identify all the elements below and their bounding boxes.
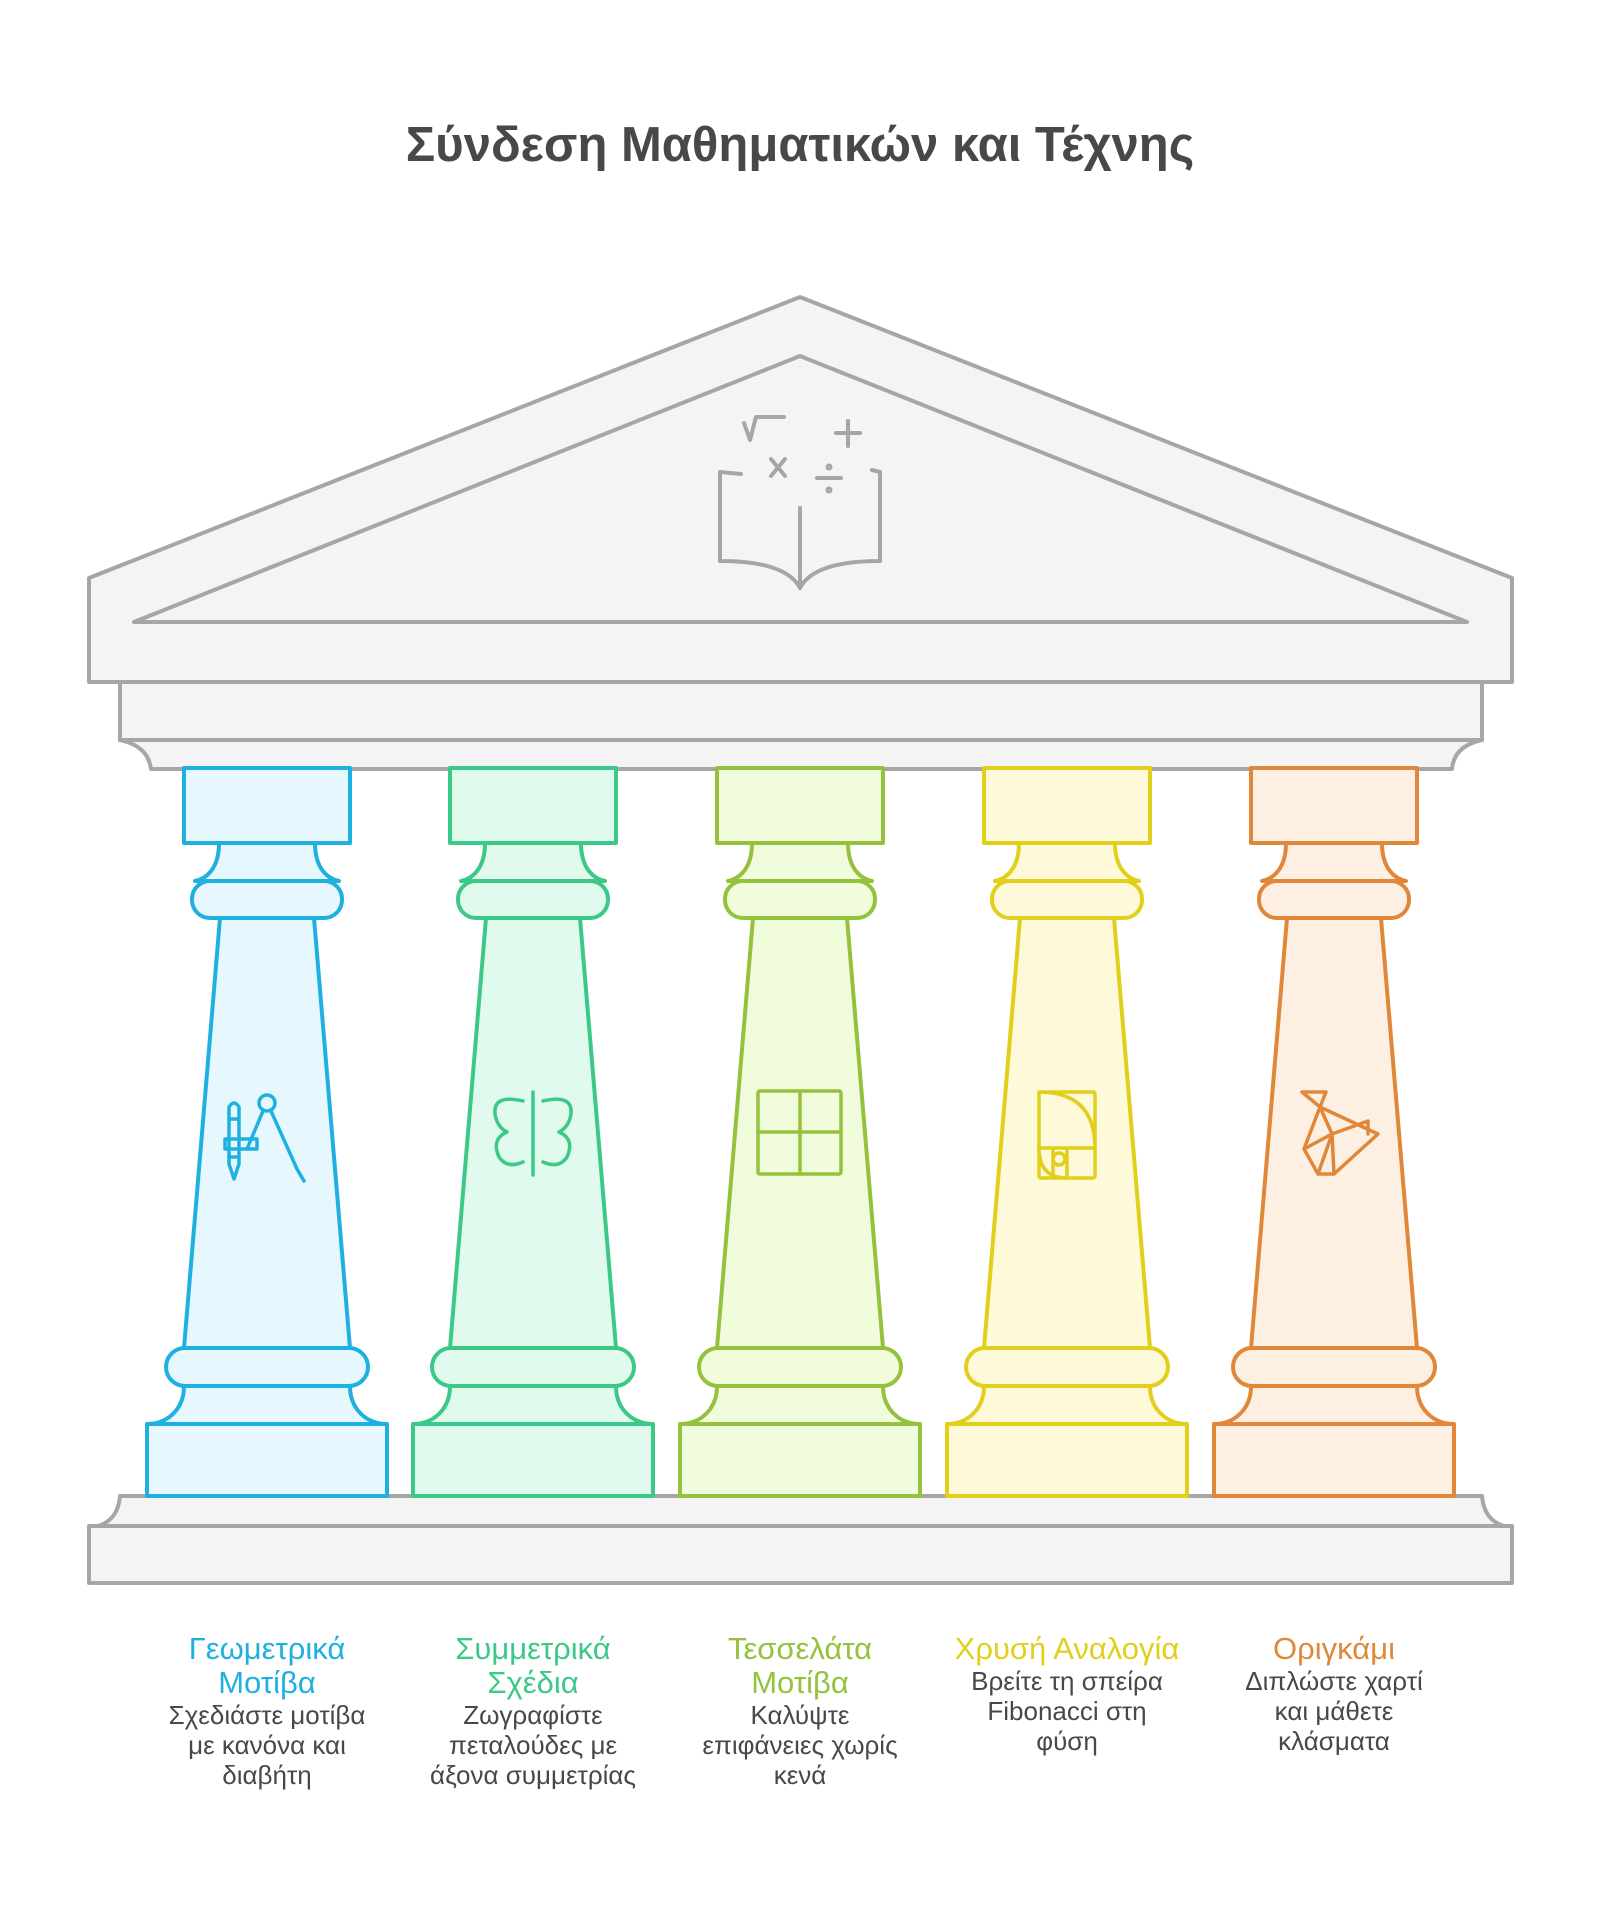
label: tessellation: κενά — [774, 1760, 826, 1790]
column: origami — [1214, 768, 1454, 1496]
label: symmetric: πεταλούδες με — [449, 1730, 617, 1760]
column: tessellation — [680, 768, 920, 1496]
icon: tiles — [758, 1091, 841, 1174]
label: origami: Διπλώστε χαρτί — [1245, 1666, 1423, 1696]
icon: math book — [720, 417, 880, 588]
label: symmetric: άξονα συμμετρίας — [430, 1760, 636, 1790]
label: geometric: Σχεδιάστε μοτίβα — [169, 1700, 365, 1730]
column: golden ratio — [947, 768, 1187, 1496]
label: symmetric: Ζωγραφίστε — [463, 1700, 603, 1730]
label: tessellation: Τεσσελάτα — [728, 1631, 872, 1666]
label: tessellation: επιφάνειες χωρίς — [702, 1730, 898, 1760]
label: tessellation — [702, 1631, 898, 1790]
base platform — [89, 1496, 1512, 1583]
label: golden ratio: Fibonacci στη — [987, 1696, 1147, 1726]
column: geometric — [147, 768, 387, 1496]
label: origami: και μάθετε — [1275, 1696, 1393, 1726]
icon: compass and pencil — [225, 1095, 304, 1181]
label: origami: κλάσματα — [1278, 1726, 1390, 1756]
label: tessellation: Καλύψτε — [750, 1700, 850, 1730]
label: golden ratio — [955, 1631, 1179, 1756]
icon: butterfly — [495, 1092, 571, 1175]
label: geometric: διαβήτη — [222, 1760, 312, 1790]
pediment — [89, 297, 1512, 769]
label: geometric: Γεωμετρικά — [189, 1631, 345, 1666]
label: golden ratio: φύση — [1036, 1726, 1098, 1756]
label: geometric: Μοτίβα — [218, 1665, 316, 1700]
label: geometric: με κανόνα και — [188, 1730, 346, 1760]
label: origami — [1245, 1631, 1423, 1756]
label: golden ratio: Χρυσή Αναλογία — [955, 1631, 1179, 1666]
title: Σύνδεση Μαθηματικών και Τέχνης — [406, 118, 1194, 172]
label: geometric — [169, 1631, 365, 1790]
label: symmetric: Σχέδια — [487, 1665, 579, 1700]
label: symmetric: Συμμετρικά — [455, 1631, 611, 1666]
label: tessellation: Μοτίβα — [751, 1665, 849, 1700]
column: symmetric — [413, 768, 653, 1496]
label: symmetric — [430, 1631, 636, 1790]
icon: fibonacci spiral — [1039, 1092, 1095, 1178]
icon: origami bird — [1302, 1092, 1378, 1174]
label: golden ratio: Βρείτε τη σπείρα — [971, 1666, 1163, 1696]
label: origami: Οριγκάμι — [1273, 1631, 1395, 1666]
